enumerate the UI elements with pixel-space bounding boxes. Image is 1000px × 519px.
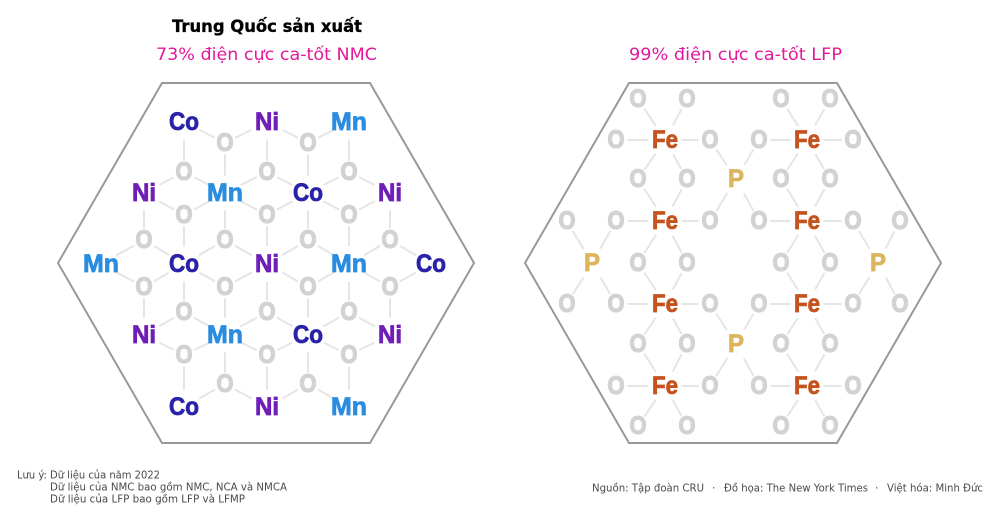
oxygen atoms: LFP: O bbox=[702, 290, 718, 318]
iron atoms: Fe bbox=[794, 372, 820, 400]
oxygen atoms: LFP: O bbox=[822, 165, 838, 193]
panel: LFP crystal structure bbox=[525, 83, 941, 443]
bonds: NMC lattice bbox=[101, 122, 431, 407]
oxygen atoms: NMC: O bbox=[300, 129, 316, 157]
oxygen atoms: LFP: O bbox=[678, 85, 696, 113]
note text block: Dữ liệu của LFP bao gồm LFP và LFMP bbox=[50, 494, 245, 506]
title: Trung Quốc sản xuất bbox=[172, 17, 362, 36]
source credits: Đồ họa: The New York Times bbox=[724, 482, 868, 494]
oxygen atoms: NMC: O bbox=[382, 273, 398, 301]
oxygen atoms: LFP: O bbox=[822, 249, 838, 277]
oxygen atoms: LFP: O bbox=[772, 85, 790, 113]
note text block bbox=[17, 470, 288, 506]
panel: NMC crystal structure bbox=[58, 83, 474, 443]
oxygen atoms: LFP: O bbox=[844, 126, 862, 154]
oxygen atoms: NMC: O bbox=[258, 158, 276, 186]
oxygen atoms: LFP: O bbox=[702, 126, 718, 154]
oxygen atoms: LFP: O bbox=[750, 126, 768, 154]
cobalt atoms bbox=[169, 108, 446, 421]
oxygen atoms: NMC: O bbox=[300, 226, 316, 254]
source credits: Việt hóa: Minh Đức bbox=[887, 482, 983, 494]
oxygen atoms: NMC: O bbox=[176, 298, 192, 326]
oxygen atoms: LFP: O bbox=[678, 249, 696, 277]
oxygen atoms: LFP: O bbox=[608, 207, 624, 235]
phosphorus atoms: P bbox=[728, 165, 744, 193]
oxygen atoms: LFP: O bbox=[772, 412, 790, 440]
heading: NMC share: 73% điện cực ca-tốt NMC bbox=[156, 44, 377, 65]
oxygen atoms: LFP: O bbox=[678, 330, 696, 358]
oxygen atoms: NMC: O bbox=[258, 341, 276, 369]
nickel atoms: Ni bbox=[255, 250, 279, 278]
oxygen atoms: LFP: O bbox=[678, 165, 696, 193]
nickel atoms: Ni bbox=[255, 393, 279, 421]
manganese atoms bbox=[83, 108, 367, 421]
oxygen atoms: LFP: O bbox=[608, 372, 624, 400]
hexagon outline: NMC bbox=[58, 83, 474, 443]
cobalt atoms: Co bbox=[293, 321, 323, 349]
oxygen atoms: LFP: O bbox=[702, 372, 718, 400]
iron atoms: Fe bbox=[652, 290, 678, 318]
phosphorus atoms: P bbox=[584, 249, 600, 277]
oxygen atoms: NMC: O bbox=[258, 201, 276, 229]
iron atoms: Fe bbox=[652, 207, 678, 235]
manganese atoms: Mn bbox=[207, 321, 243, 349]
oxygen atoms: LFP: O bbox=[630, 330, 646, 358]
oxygen atoms: LFP: O bbox=[772, 330, 790, 358]
heading: LFP share: 99% điện cực ca-tốt LFP bbox=[629, 44, 842, 65]
source credits bbox=[592, 482, 983, 494]
phosphorus atoms: P bbox=[870, 249, 886, 277]
oxygen atoms: LFP: O bbox=[892, 290, 908, 318]
cobalt atoms: Co bbox=[416, 250, 446, 278]
oxygen atoms: LFP: O bbox=[822, 85, 838, 113]
iron atoms: Fe bbox=[794, 207, 820, 235]
nickel atoms bbox=[132, 108, 402, 421]
nickel atoms: Ni bbox=[132, 321, 156, 349]
manganese atoms: Mn bbox=[83, 250, 119, 278]
oxygen atoms: NMC: O bbox=[382, 226, 398, 254]
iron atoms: Fe bbox=[652, 372, 678, 400]
manganese atoms: Mn bbox=[207, 179, 243, 207]
oxygen atoms: NMC: O bbox=[340, 298, 358, 326]
iron atoms bbox=[652, 126, 820, 400]
oxygen atoms: NMC bbox=[136, 129, 398, 398]
bond gaps around NMC metal atoms bbox=[101, 122, 431, 407]
iron atoms: Fe bbox=[652, 126, 678, 154]
bonds: LFP lattice bbox=[567, 99, 900, 426]
oxygen atoms: NMC: O bbox=[136, 273, 152, 301]
bond gaps around LFP oxygen atoms bbox=[567, 99, 900, 426]
oxygen atoms: LFP bbox=[558, 85, 908, 440]
source credits: · bbox=[875, 482, 878, 494]
manganese atoms: Mn bbox=[331, 250, 367, 278]
oxygen atoms: NMC: O bbox=[340, 201, 358, 229]
oxygen atoms: LFP: O bbox=[772, 249, 790, 277]
cobalt atoms: Co bbox=[169, 250, 199, 278]
oxygen atoms: LFP: O bbox=[630, 165, 646, 193]
oxygen atoms: LFP: O bbox=[558, 207, 576, 235]
nickel atoms: Ni bbox=[255, 108, 279, 136]
oxygen atoms: LFP: O bbox=[844, 207, 862, 235]
manganese atoms: Mn bbox=[331, 393, 367, 421]
oxygen atoms: NMC: O bbox=[300, 370, 316, 398]
oxygen atoms: NMC: O bbox=[258, 298, 276, 326]
cobalt atoms: Co bbox=[169, 393, 199, 421]
bond gaps around NMC oxygen atoms bbox=[144, 143, 390, 384]
oxygen atoms: NMC: O bbox=[176, 341, 192, 369]
note text block: Lưu ý: Dữ liệu của năm 2022 bbox=[17, 470, 160, 482]
oxygen atoms: LFP: O bbox=[750, 207, 768, 235]
nickel atoms: Ni bbox=[378, 321, 402, 349]
oxygen atoms: NMC: O bbox=[176, 201, 192, 229]
oxygen atoms: NMC: O bbox=[340, 158, 358, 186]
oxygen atoms: LFP: O bbox=[844, 290, 862, 318]
bond gaps around LFP iron and phosphorus atoms bbox=[592, 140, 878, 386]
oxygen atoms: NMC: O bbox=[176, 158, 192, 186]
iron atoms: Fe bbox=[794, 126, 820, 154]
oxygen atoms: LFP: O bbox=[750, 372, 768, 400]
oxygen atoms: LFP: O bbox=[678, 412, 696, 440]
oxygen atoms: LFP: O bbox=[892, 207, 908, 235]
oxygen atoms: LFP: O bbox=[608, 290, 624, 318]
oxygen atoms: NMC: O bbox=[340, 341, 358, 369]
note text block: Dữ liệu của NMC bao gồm NMC, NCA và NMCA bbox=[50, 482, 288, 494]
oxygen atoms: LFP: O bbox=[844, 372, 862, 400]
nickel atoms: Ni bbox=[132, 179, 156, 207]
oxygen atoms: NMC: O bbox=[216, 273, 234, 301]
oxygen atoms: NMC: O bbox=[216, 226, 234, 254]
oxygen atoms: LFP: O bbox=[630, 412, 646, 440]
oxygen atoms: LFP: O bbox=[772, 165, 790, 193]
oxygen atoms: LFP: O bbox=[750, 290, 768, 318]
oxygen atoms: NMC: O bbox=[136, 226, 152, 254]
oxygen atoms: LFP: O bbox=[702, 207, 718, 235]
phosphorus atoms bbox=[584, 165, 886, 358]
oxygen atoms: LFP: O bbox=[608, 126, 624, 154]
manganese atoms: Mn bbox=[331, 108, 367, 136]
oxygen atoms: LFP: O bbox=[630, 249, 646, 277]
nickel atoms: Ni bbox=[378, 179, 402, 207]
oxygen atoms: LFP: O bbox=[822, 330, 838, 358]
cobalt atoms: Co bbox=[293, 179, 323, 207]
source credits: · bbox=[712, 482, 715, 494]
oxygen atoms: LFP: O bbox=[630, 85, 646, 113]
iron atoms: Fe bbox=[794, 290, 820, 318]
oxygen atoms: NMC: O bbox=[216, 129, 234, 157]
oxygen atoms: LFP: O bbox=[558, 290, 576, 318]
hexagon outline: LFP bbox=[525, 83, 941, 443]
cobalt atoms: Co bbox=[169, 108, 199, 136]
oxygen atoms: NMC: O bbox=[216, 370, 234, 398]
source credits: Nguồn: Tập đoàn CRU bbox=[592, 482, 704, 494]
oxygen atoms: NMC: O bbox=[300, 273, 316, 301]
oxygen atoms: LFP: O bbox=[822, 412, 838, 440]
phosphorus atoms: P bbox=[728, 330, 744, 358]
